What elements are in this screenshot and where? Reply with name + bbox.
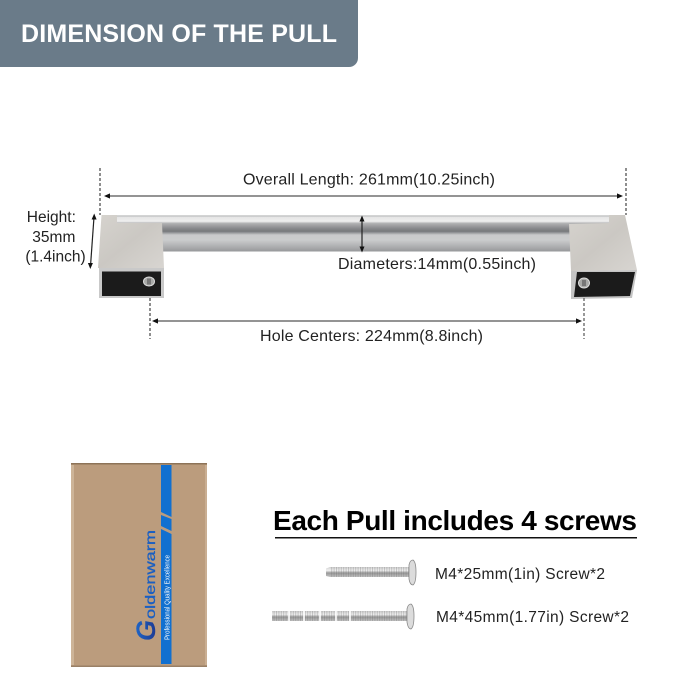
height label: (1.4inch) <box>25 248 86 266</box>
brand tagline: Professional Quality Excellence <box>164 555 172 640</box>
product: bar pull <box>98 215 637 299</box>
blue stripe <box>161 465 172 664</box>
height label: 35mm <box>32 229 75 246</box>
right mount block <box>569 215 637 299</box>
product box <box>71 463 207 667</box>
height label: Height: <box>27 209 76 226</box>
short screw label: M4*25mm(1in) Screw*2 <box>435 566 605 583</box>
heading: screws included: Each Pull includes 4 screws <box>273 505 637 536</box>
overall length label: Overall Length: 261mm(10.25inch) <box>243 172 495 188</box>
banner: dimension of the pull <box>0 0 358 67</box>
dimension: hole centers <box>150 298 584 345</box>
dimension: height <box>25 209 97 269</box>
dimension: diameter <box>338 216 536 273</box>
brand logo G: G <box>131 620 161 641</box>
dimension: overall length <box>100 168 626 215</box>
long screw <box>272 604 414 629</box>
long screw label: M4*45mm(1.77in) Screw*2 <box>436 609 629 626</box>
left mount block <box>98 215 164 298</box>
brand name: oldenwarm <box>142 530 158 619</box>
pull bar <box>117 216 609 252</box>
diameter label: Diameters:14mm(0.55inch) <box>338 256 536 273</box>
banner heading: DIMENSION OF THE PULL <box>21 20 337 48</box>
short screw <box>326 560 416 585</box>
hole centers label: Hole Centers: 224mm(8.8inch) <box>260 328 483 345</box>
